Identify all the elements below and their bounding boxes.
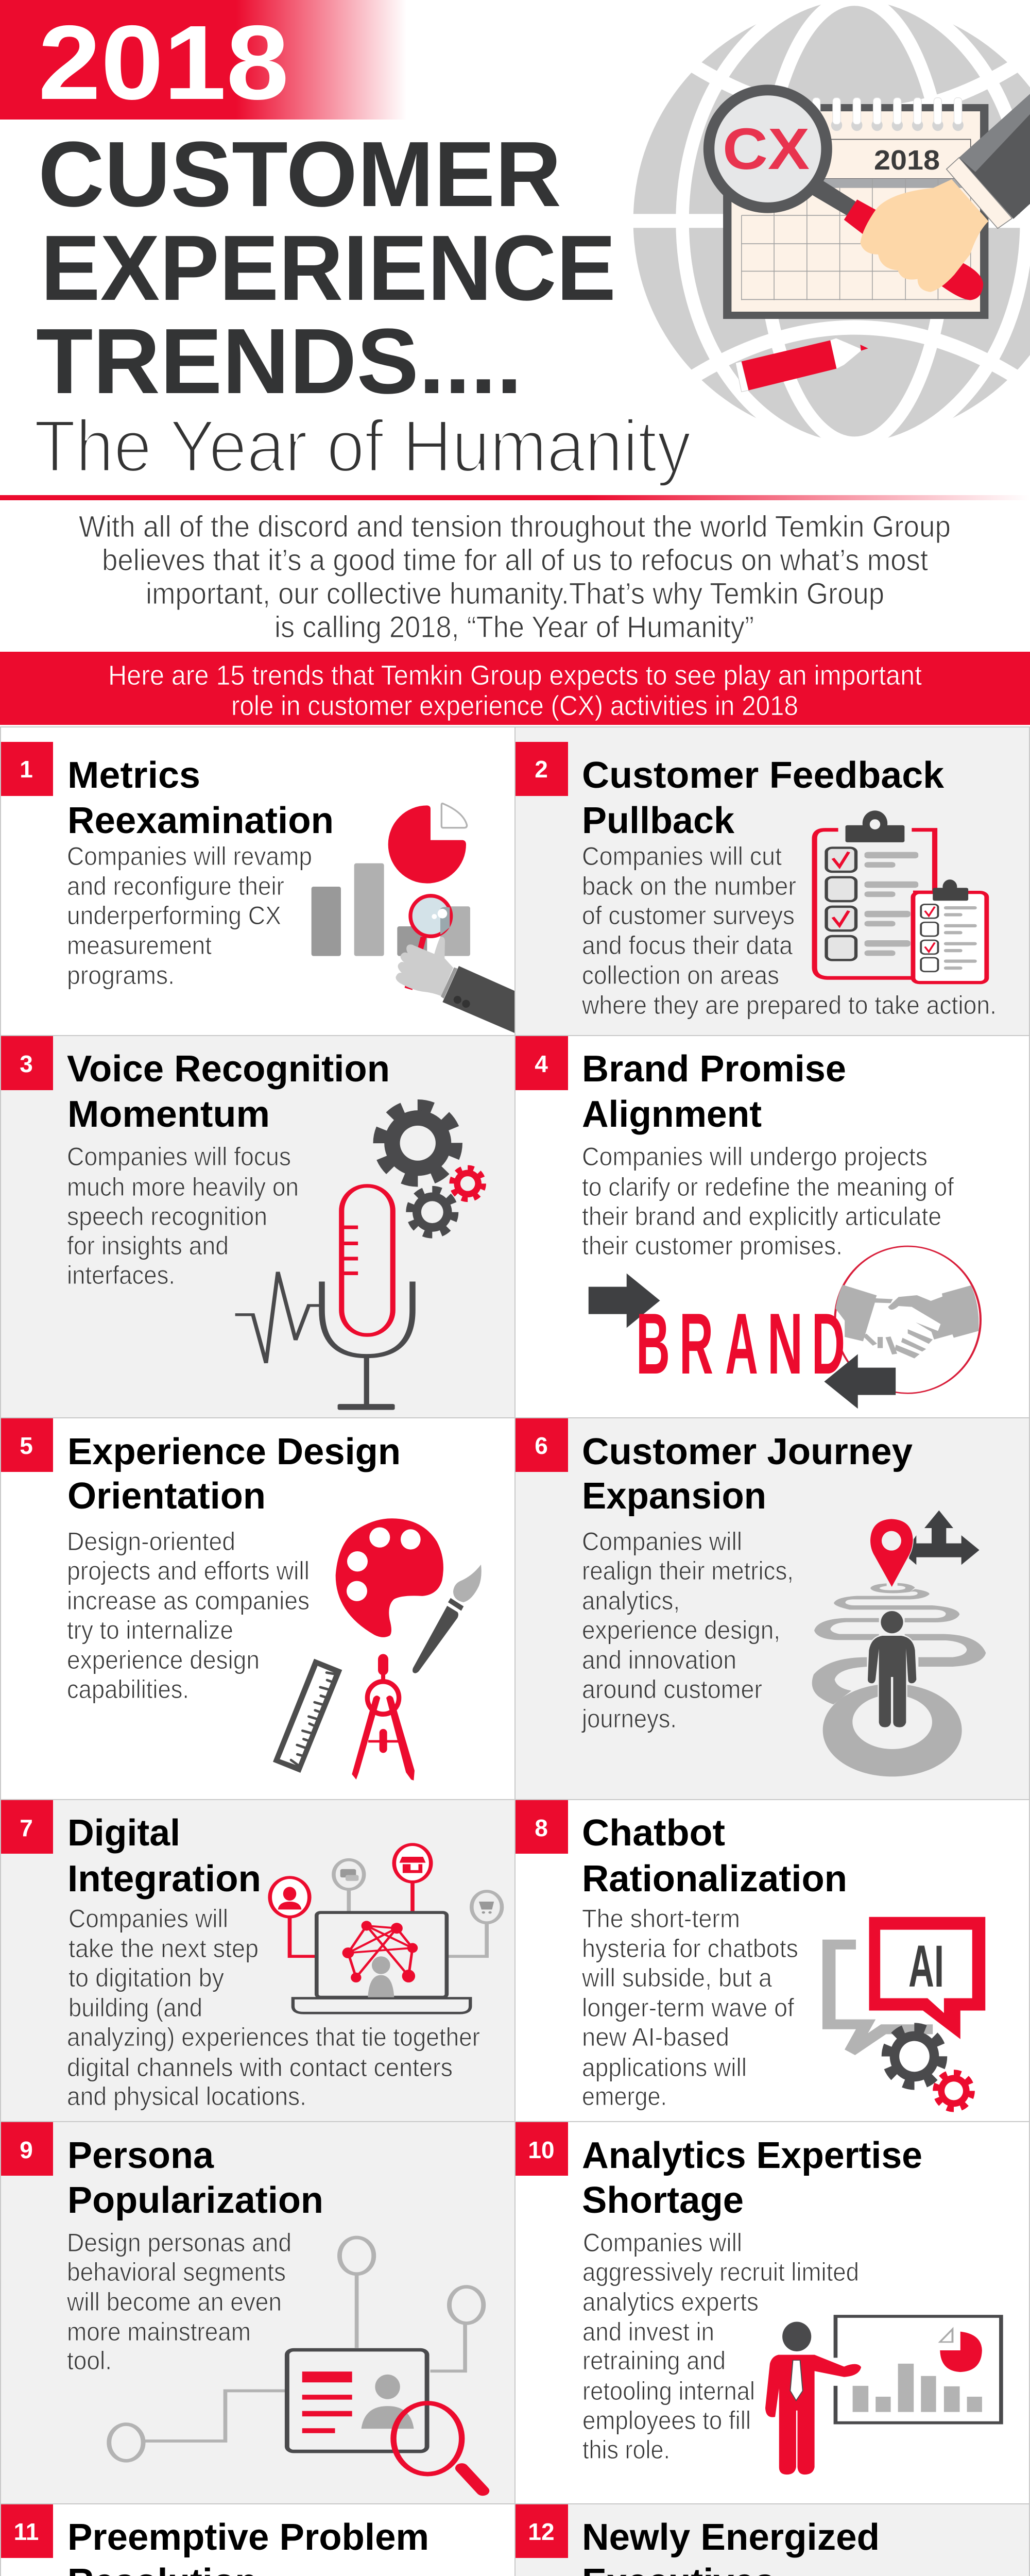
heading: Integration <box>67 1858 261 1900</box>
body text: much more heavily on <box>67 1173 299 1201</box>
heading: Customer Feedback <box>582 755 945 796</box>
title: CUSTOMER <box>38 123 561 226</box>
icon: journey path, pin and person <box>812 1511 986 1776</box>
heading: Brand Promise <box>582 1048 846 1090</box>
badge: 3: 3 <box>20 1050 33 1077</box>
body text: this role. <box>582 2435 670 2464</box>
heading: Popularization <box>67 2180 323 2221</box>
panel: trend 9 Persona Popularization <box>0 2122 515 2504</box>
icon: globe <box>618 0 1030 450</box>
body text: Companies will focus <box>67 1142 291 1171</box>
badge: 12 <box>515 2504 568 2558</box>
icon: hand and sleeve <box>860 94 1030 292</box>
heading: Chatbot <box>582 1812 725 1854</box>
body text: Design personas and <box>67 2228 291 2257</box>
icon: arrow pointing right <box>589 1274 660 1328</box>
body text: Companies will <box>583 2228 742 2257</box>
body text: around customer <box>582 1675 762 1704</box>
body text: behavioral segments <box>67 2258 286 2286</box>
intro text: is calling 2018, “The Year of Humanity” <box>274 611 754 644</box>
body text <box>581 842 997 1020</box>
icon: persona card with magnifier <box>109 2238 484 2491</box>
body text: increase as companies <box>67 1586 310 1615</box>
body text <box>67 842 312 990</box>
heading: Preemptive Problem <box>67 2517 429 2558</box>
badge: 2: 2 <box>535 756 548 783</box>
heading: Experience Design <box>67 1431 401 1472</box>
body text: back on the number <box>582 872 796 901</box>
body text: aggressively recruit limited <box>582 2258 859 2286</box>
badge: 5 <box>0 1418 53 1472</box>
body text: Companies will undergo projects <box>582 1142 928 1171</box>
heading: Pullback <box>582 800 735 841</box>
body text: to clarify or redefine the meaning of <box>582 1173 954 1201</box>
icon: calendar <box>723 98 988 319</box>
badge: 2 <box>515 742 568 796</box>
badge: 4: 4 <box>535 1050 548 1077</box>
body text: interfaces. <box>67 1261 175 1290</box>
body text <box>67 1527 310 1704</box>
body text: retooling internal <box>582 2377 755 2405</box>
body text <box>582 1142 954 1260</box>
body text: where they are prepared to take action. <box>581 991 997 1020</box>
body text: Companies will <box>68 1904 228 1933</box>
illustration: globe with calendar, magnifier and marker <box>618 0 1030 450</box>
icon: arrow pointing left <box>824 1354 896 1409</box>
body text: Companies will revamp <box>67 842 312 871</box>
icon: laptop with connected channels <box>270 1844 502 2013</box>
heading: Analytics Expertise <box>582 2135 922 2176</box>
brand wordmark: N <box>767 1295 803 1392</box>
badge: 10 <box>515 2122 568 2176</box>
badge: 11: 11 <box>14 2518 39 2545</box>
title: TRENDS.... <box>36 310 522 413</box>
panel: trend 2 Customer Feedback Pullback <box>515 727 1030 1036</box>
panel: trend 4 Brand Promise Alignment <box>515 1036 1030 1418</box>
heading: Expansion <box>582 1476 766 1517</box>
panel: trend 8 Chatbot Rationalization <box>515 1800 1030 2122</box>
brand wordmark: R <box>679 1295 713 1392</box>
red intro band: Here are 15 trends that Temkin Group expects to see play an important <box>108 660 922 691</box>
intro text: With all of the discord and tension throughout the world Temkin Group <box>79 510 951 544</box>
body text: employees to fill <box>582 2406 751 2435</box>
brand wordmark: D <box>812 1295 845 1392</box>
body text: for insights and <box>67 1231 229 1260</box>
panel: trend 1 Metrics Reexamination <box>0 727 515 1036</box>
brand wordmark: A <box>725 1295 758 1392</box>
panel: trend 5 Experience Design Orientation <box>0 1418 515 1800</box>
badge: 4 <box>515 1036 568 1090</box>
badge: 6 <box>515 1418 568 1472</box>
heading <box>67 755 334 841</box>
heading <box>67 1812 261 1900</box>
body text: experience design, <box>582 1616 780 1645</box>
heading <box>67 2517 429 2576</box>
panel: trend 3 Voice Recognition Momentum <box>0 1036 515 1418</box>
badge: 5: 5 <box>20 1432 33 1459</box>
icon: magnifying glass lens <box>703 84 832 213</box>
body text: tool. <box>67 2346 112 2375</box>
body text: retraining and <box>582 2346 726 2375</box>
title: EXPERIENCE <box>41 216 616 320</box>
body text: hysteria for chatbots <box>582 1934 798 1963</box>
badge: 10: 10 <box>528 2137 555 2163</box>
heading: Newly Energized <box>582 2517 880 2558</box>
body text: more mainstream <box>67 2317 251 2346</box>
body text: and focus their data <box>582 931 793 960</box>
body text: longer-term wave of <box>582 1993 794 2022</box>
badge: 8: 8 <box>535 1815 548 1841</box>
badge: 11 <box>0 2504 53 2558</box>
body text: and invest in <box>582 2317 714 2346</box>
body text: Companies will cut <box>582 842 782 871</box>
heading <box>582 1048 846 1135</box>
heading: Persona <box>67 2135 214 2176</box>
red intro band: role in customer experience (CX) activities in 2018 <box>231 690 798 721</box>
panel: trend 12 Newly Energized Executives <box>515 2504 1030 2576</box>
heading: Orientation <box>67 1476 266 1517</box>
body text: capabilities. <box>67 1675 189 1704</box>
body text: and innovation <box>582 1646 736 1674</box>
icon: palette, brush, ruler and compass <box>273 1518 482 1781</box>
AI label: AI <box>908 1934 944 1999</box>
heading <box>582 2135 922 2221</box>
panel: trend 7 Digital Integration <box>0 1800 515 2122</box>
heading <box>67 1431 401 1517</box>
body text: digital channels with contact centers <box>67 2053 453 2082</box>
intro text <box>79 510 951 644</box>
body text: collection on areas <box>582 961 779 990</box>
heading: Rationalization <box>582 1858 847 1900</box>
icon: microphone, gears and waveform <box>235 1108 483 1410</box>
title <box>36 123 616 413</box>
body text: programs. <box>67 961 175 990</box>
panel: trend 10 Analytics Expertise Shortage <box>515 2122 1030 2504</box>
body text: new AI-based <box>582 2023 729 2052</box>
body text: their customer promises. <box>582 1231 843 1260</box>
body text: The short-term <box>582 1904 740 1933</box>
heading: Customer Journey <box>582 1431 913 1472</box>
body text: analytics experts <box>582 2287 759 2316</box>
heading <box>67 1048 390 1135</box>
red intro band <box>0 652 1030 725</box>
body text: Design-oriented <box>67 1527 235 1556</box>
icon: clipboards with checklists <box>815 810 987 982</box>
body text: try to internalize <box>67 1616 233 1645</box>
body text: emerge. <box>582 2082 667 2111</box>
heading <box>582 1812 847 1900</box>
icon: AI speech bubbles and gears <box>829 1917 985 2108</box>
heading: Alignment <box>582 1094 762 1135</box>
magnified CX label: CX <box>723 116 810 181</box>
heading: Voice Recognition <box>67 1048 390 1090</box>
badge: 3 <box>0 1036 53 1090</box>
body text: journeys. <box>581 1704 677 1733</box>
body text: speech recognition <box>67 1202 267 1231</box>
body text: will subside, but a <box>581 1963 772 1992</box>
body text: applications will <box>582 2053 747 2082</box>
badge: 8 <box>515 1800 568 1854</box>
heading: Metrics <box>67 755 200 796</box>
body text <box>67 1904 480 2111</box>
icon: handshake in circle <box>835 1246 981 1393</box>
badge: 12: 12 <box>528 2518 555 2545</box>
heading <box>582 755 945 841</box>
body text <box>581 1904 798 2111</box>
heading <box>67 2135 323 2221</box>
brand wordmark: B <box>636 1295 670 1392</box>
heading: Digital <box>67 1812 180 1854</box>
body text: realign their metrics, <box>582 1556 794 1585</box>
badge: 7 <box>0 1800 53 1854</box>
body text: analytics, <box>582 1586 680 1615</box>
body text: measurement <box>67 931 212 960</box>
body text <box>66 2228 291 2375</box>
heading: Reexamination <box>67 800 334 841</box>
body text: and physical locations. <box>67 2082 306 2111</box>
body text: analyzing) experiences that tie together <box>67 2023 480 2052</box>
panel: trend 11 Preemptive Problem Resolution <box>0 2504 515 2576</box>
badge: 9 <box>0 2122 53 2176</box>
body text <box>582 2228 859 2464</box>
body text: underperforming CX <box>67 901 281 930</box>
year banner <box>0 0 407 122</box>
body text: building (and <box>68 1993 202 2022</box>
heading: Shortage <box>582 2180 744 2221</box>
heading: Momentum <box>67 1094 270 1135</box>
body text: Companies will <box>582 1527 742 1556</box>
icon: red marker <box>735 338 868 392</box>
intro text: important, our collective humanity.That’s why Temkin Group <box>146 577 884 611</box>
panel: trend 6 Customer Journey Expansion <box>515 1418 1030 1800</box>
body text: will become an even <box>66 2287 282 2316</box>
heading <box>582 2517 880 2576</box>
subtitle: The Year of Humanity <box>34 405 691 487</box>
badge: 1: 1 <box>20 756 33 783</box>
icon: bar chart, pie and magnifier in hand <box>312 804 514 1033</box>
badge: 6: 6 <box>535 1432 548 1459</box>
body text: of customer surveys <box>582 901 795 930</box>
intro text: believes that it’s a good time for all of us to refocus on what’s most <box>102 544 928 577</box>
body text <box>581 1527 794 1733</box>
icon: magnifying glass handle <box>813 181 983 300</box>
body text: take the next step <box>68 1934 259 1963</box>
body text: their brand and explicitly articulate <box>582 1202 941 1231</box>
heading <box>582 1431 913 1517</box>
brand wordmark <box>636 1295 845 1392</box>
year banner: 2018 <box>38 4 289 122</box>
body text: experience design <box>67 1646 260 1674</box>
badge: 1 <box>0 742 53 796</box>
body text <box>67 1142 299 1290</box>
calendar year label: 2018 <box>874 145 940 176</box>
body text: and reconfigure their <box>67 872 284 901</box>
icon: presenter with chart <box>765 2316 1001 2475</box>
body text: to digitation by <box>68 1963 224 1992</box>
badge: 7: 7 <box>20 1815 33 1841</box>
body text: projects and efforts will <box>67 1556 310 1585</box>
badge: 9: 9 <box>20 2137 33 2163</box>
